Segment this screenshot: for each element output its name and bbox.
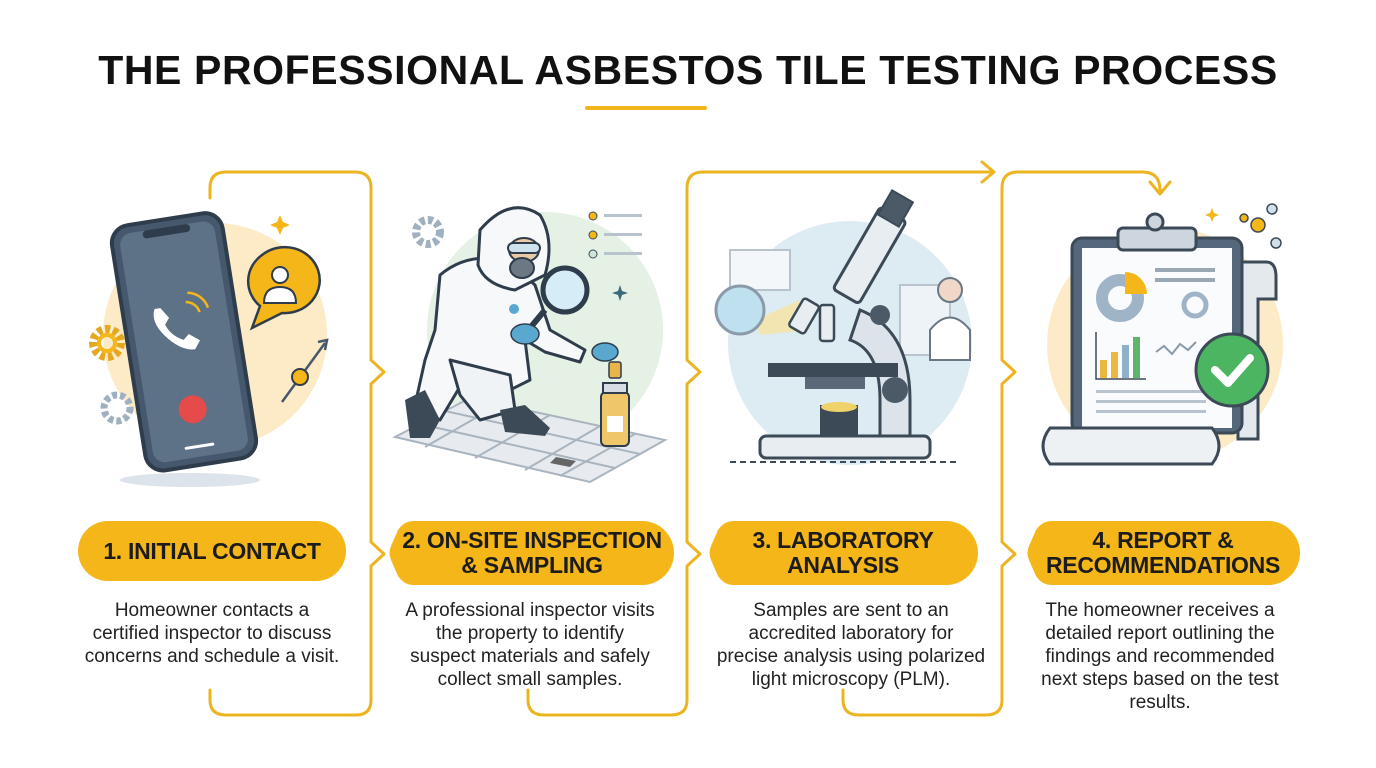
pill 1	[78, 521, 346, 581]
description 2: A professional inspector visits	[405, 600, 655, 621]
description 3: light microscopy (PLM).	[752, 669, 950, 690]
base	[760, 436, 930, 458]
description 3: Samples are sent to an	[753, 600, 949, 621]
pill 2	[390, 521, 674, 585]
description 1: concerns and schedule a visit.	[85, 646, 339, 667]
description 4: next steps based on the test	[1041, 669, 1279, 690]
trend arrow	[282, 343, 325, 402]
magnifier	[530, 310, 545, 328]
description 4: The homeowner receives a	[1045, 600, 1275, 621]
description 4: findings and recommended	[1045, 646, 1275, 667]
illustration 2: inspector	[395, 208, 665, 482]
description 2: collect small samples.	[438, 669, 622, 690]
illustration 4: report clipboard	[1043, 204, 1283, 464]
pill label 1: 1. INITIAL CONTACT	[103, 538, 321, 564]
leg/knee	[450, 360, 515, 420]
title: THE PROFESSIONAL ASBESTOS TILE TESTING PROCESS	[98, 47, 1278, 93]
description 4	[1041, 600, 1279, 713]
hood	[478, 208, 549, 290]
molecule	[1251, 218, 1265, 232]
illustration 3: microscope	[716, 189, 972, 465]
gear + list	[416, 220, 440, 244]
suit body	[415, 258, 585, 420]
pill label 4: RECOMMENDATIONS	[1046, 552, 1280, 578]
description 2	[405, 600, 655, 690]
jar	[601, 392, 629, 446]
description 3: accredited laboratory for	[749, 623, 953, 644]
title underline	[585, 106, 707, 110]
pill label 4	[1046, 527, 1280, 578]
connector line 3 with arrow	[843, 172, 1170, 715]
pill label 2: & SAMPLING	[461, 552, 603, 578]
description 4: detailed report outlining the	[1045, 623, 1275, 644]
illustration 1: phone	[93, 211, 327, 487]
description 4: results.	[1129, 692, 1191, 713]
charts	[1102, 280, 1138, 316]
arm	[850, 310, 910, 440]
connector line 2 with arrow	[528, 162, 994, 715]
speech bubble	[248, 247, 320, 328]
pill label 3: 3. LABORATORY	[753, 527, 933, 553]
description 1	[85, 600, 339, 667]
pill label 4: 4. REPORT &	[1092, 527, 1234, 553]
description 3	[717, 600, 985, 690]
pill 3	[710, 521, 978, 585]
tile floor	[395, 398, 665, 482]
description 2: the property to identify	[436, 623, 624, 644]
bottom scroll	[1043, 428, 1219, 464]
boots	[405, 390, 440, 438]
stage	[768, 363, 898, 377]
scroll	[1238, 262, 1276, 439]
description 2: suspect materials and safely	[410, 646, 650, 667]
pill label 2	[402, 527, 662, 578]
description 1: certified inspector to discuss	[93, 623, 331, 644]
tube	[833, 189, 916, 304]
phone body	[109, 211, 259, 473]
pill label 3	[753, 527, 934, 578]
check badge	[1196, 334, 1268, 406]
pill label 3: ANALYSIS	[787, 552, 899, 578]
pill label 2: 2. ON-SITE INSPECTION	[402, 527, 662, 553]
connector line 1	[210, 172, 384, 715]
description 1: Homeowner contacts a	[115, 600, 309, 621]
pill 4	[1028, 521, 1300, 585]
gears	[93, 329, 121, 357]
description 3: precise analysis using polarized	[717, 646, 985, 667]
